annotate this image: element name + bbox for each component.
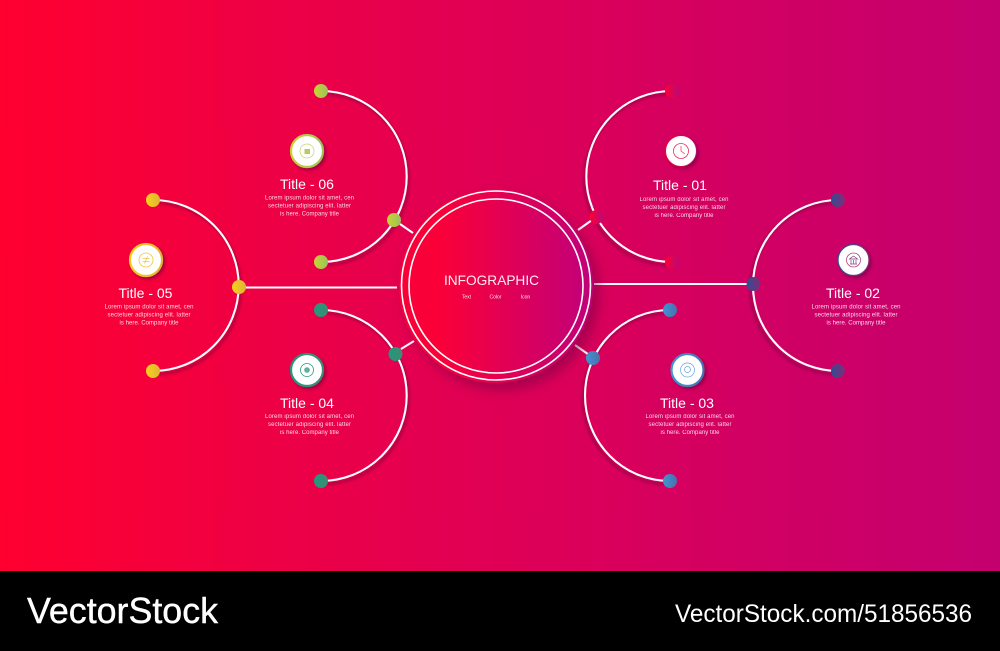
icon 06: [291, 135, 323, 167]
arc 02: [750, 200, 838, 374]
icon 05: [130, 244, 162, 276]
dots 04: [314, 303, 402, 488]
text 02: sectetuer adipiscing elit. latter: [814, 312, 898, 318]
central sub labels: Icon: [521, 294, 530, 300]
text 02: Lorem ipsum dolor sit amet, cen: [812, 304, 900, 310]
heading 01: Title - 01: [653, 177, 707, 193]
central sub labels: Color: [490, 294, 502, 300]
heading 06: Title - 06: [280, 176, 334, 192]
text 01: is here. Company title: [654, 213, 714, 219]
text 03: [646, 414, 734, 436]
heading 04: Title - 04: [280, 395, 334, 411]
dots 05: [146, 193, 246, 378]
text 05: Lorem ipsum dolor sit amet, cen: [104, 304, 194, 310]
arc 05: [153, 200, 241, 374]
text 01: Lorem ipsum dolor sit amet, cen: [640, 197, 728, 203]
arc 04: [321, 310, 409, 484]
dots 06: [314, 84, 401, 269]
icon 01: [666, 136, 696, 166]
text 01: sectetuer adipiscing elit. latter: [642, 205, 726, 211]
icon 04: [291, 354, 323, 386]
text 03: Lorem ipsum dolor sit amet, cen: [646, 414, 734, 420]
panel: title 03: [583, 303, 734, 488]
central sub labels: Text: [462, 294, 472, 300]
text 01: [640, 197, 728, 219]
central sub labels: [462, 294, 530, 300]
central title: INFOGRAPHIC: [444, 272, 539, 288]
text 05: [104, 304, 194, 326]
text 03: sectetuer adipiscing elit. latter: [648, 422, 732, 428]
text 04: is here. Company title: [280, 430, 340, 436]
panel: title 02: [746, 193, 900, 378]
arc 03: [583, 310, 670, 484]
text 05: is here. Company title: [120, 320, 179, 326]
heading 05: Title - 05: [119, 285, 173, 301]
text 06: sectetuer adipiscing elit. latter: [268, 204, 351, 210]
text 04: [265, 414, 354, 436]
dots 03: [586, 303, 677, 488]
dots 01: [590, 84, 679, 269]
text 02: is here. Company title: [826, 320, 886, 326]
central circle: [399, 189, 593, 383]
panel: title 05: [104, 193, 246, 378]
footer bar: [0, 571, 1000, 651]
arc 06: [321, 91, 409, 265]
outer ring: [402, 191, 590, 380]
dots 02: [746, 193, 845, 378]
text 06: Lorem ipsum dolor sit amet, cen: [265, 196, 354, 202]
footer url: VectorStock.com/51856536: [675, 600, 972, 628]
text 04: sectetuer adipiscing elit. latter: [268, 422, 351, 428]
text 04: Lorem ipsum dolor sit amet, cen: [265, 414, 354, 420]
footer logo: VectorStock: [27, 590, 219, 631]
panel: title 06: [265, 84, 409, 269]
text 03: is here. Company title: [660, 430, 720, 436]
panel: title 01: [584, 84, 728, 269]
icon 03: [672, 354, 704, 386]
heading 03: Title - 03: [660, 395, 714, 411]
text 05: sectetuer adipiscing elit. latter: [108, 312, 190, 318]
text 02: [812, 304, 900, 326]
text 06: [265, 196, 354, 218]
panel: title 04: [265, 303, 409, 488]
arc 01: [584, 91, 672, 265]
heading 02: Title - 02: [826, 285, 880, 301]
inner ring: [409, 199, 583, 373]
text 06: is here. Company title: [280, 212, 340, 218]
connector lines: [245, 220, 752, 357]
central disc: [399, 189, 593, 383]
icon 02: [838, 244, 869, 276]
